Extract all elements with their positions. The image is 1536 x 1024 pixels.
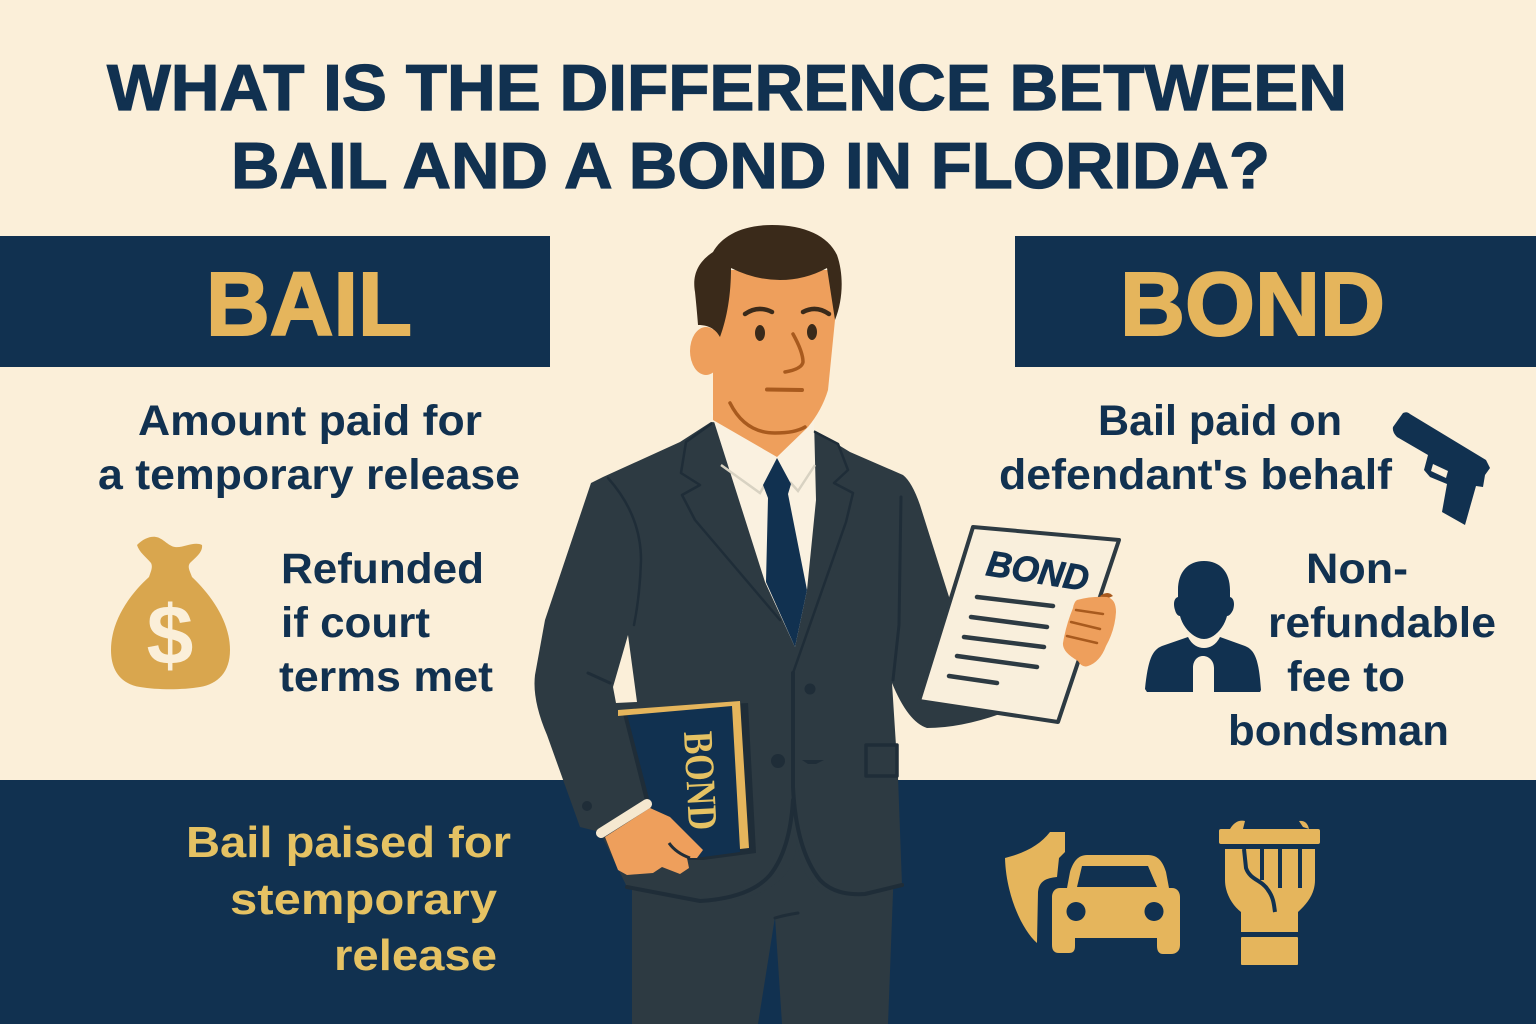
icon: bondsman silhouette <box>1145 561 1261 692</box>
illustration: man in suit <box>534 225 1119 1024</box>
document <box>919 527 1119 722</box>
icon: money bag: $ <box>147 588 193 682</box>
book held under arm <box>618 701 756 860</box>
panel: bail header <box>0 236 550 367</box>
trousers <box>632 840 895 1024</box>
hand holding document <box>1063 593 1116 666</box>
icon: handgun <box>1393 412 1490 525</box>
text: bottom left gold caption: release <box>334 931 497 980</box>
icon: shield and car <box>1005 832 1180 954</box>
icon: money bag <box>111 537 230 689</box>
text: refunded: Refunded <box>281 545 484 593</box>
book held under arm: BOND <box>674 730 725 831</box>
text: bail definition <box>98 397 520 499</box>
text: bottom left gold caption: Bail paised for <box>186 818 511 867</box>
text: bond definition: Bail paid on <box>1098 397 1342 445</box>
text: refunded <box>279 545 493 701</box>
panel: bail header: BAIL <box>206 255 412 355</box>
panel: bond header <box>1015 236 1536 367</box>
title: BAIL AND A BOND IN FLORIDA? <box>231 129 1270 202</box>
text: non-refundable fee: Non- <box>1306 545 1408 593</box>
jacket lines <box>588 424 902 918</box>
text: non-refundable fee: fee to <box>1287 653 1405 701</box>
buttons <box>582 684 824 811</box>
text: bond definition: defendant's behalf <box>999 451 1393 499</box>
text: bail definition: Amount paid for <box>138 397 482 445</box>
head <box>690 225 842 457</box>
text: bottom left gold caption <box>186 818 511 980</box>
title: WHAT IS THE DIFFERENCE BETWEEN <box>107 51 1347 124</box>
text: bottom left gold caption: stemporary <box>230 875 498 924</box>
text: non-refundable fee: bondsman <box>1228 707 1449 755</box>
document: BOND <box>984 542 1092 599</box>
text: non-refundable fee <box>1228 545 1496 755</box>
jacket <box>534 422 1000 900</box>
shirt <box>711 412 816 647</box>
bottom band <box>0 780 1536 1024</box>
text: refunded: if court <box>281 599 430 647</box>
icon: hand and bar <box>1219 821 1320 965</box>
collar folds <box>721 465 815 493</box>
text: refunded: terms met <box>279 653 493 701</box>
text: bond definition <box>999 397 1393 499</box>
text: non-refundable fee: refundable <box>1268 599 1496 647</box>
text: bail definition: a temporary release <box>98 451 520 499</box>
tie <box>763 458 807 647</box>
hand on book <box>601 804 703 875</box>
title <box>107 51 1347 202</box>
panel: bond header: BOND <box>1120 255 1385 355</box>
